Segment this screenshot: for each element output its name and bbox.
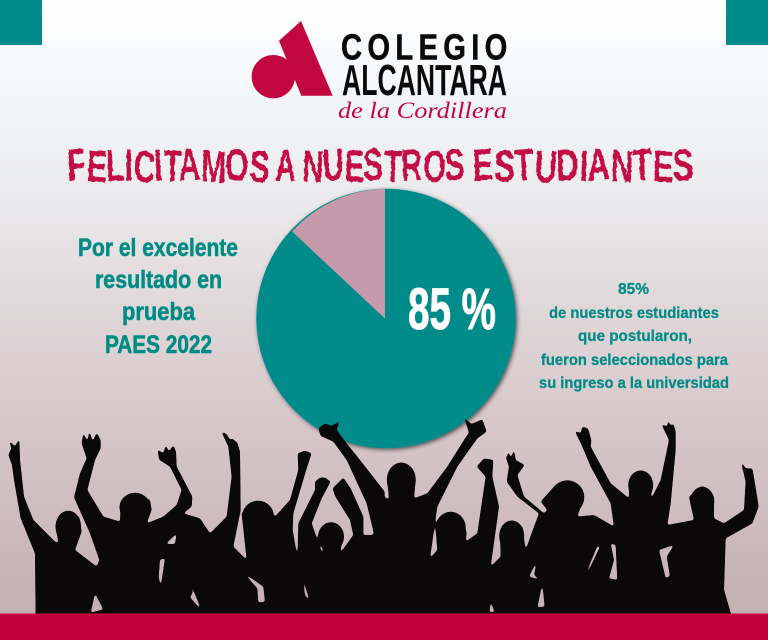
left text block: resultado en: [95, 266, 222, 294]
pie slice: 85%: [256, 189, 516, 448]
title: FELICITAMOS: [65, 139, 272, 192]
left text block: Por el excelente: [78, 234, 238, 262]
logo: Colegio Alcantara de la Cordillera: [252, 21, 507, 123]
left text block: PAES 2022: [105, 331, 212, 359]
logo wordmark: ALCANTARA: ALCANTARA: [342, 56, 507, 105]
title: [65, 139, 694, 193]
left text block: [78, 234, 238, 359]
right text block: 85%: [618, 281, 649, 298]
title: NUESTROS: [301, 139, 465, 192]
right text block: su ingreso a la universidad: [539, 375, 729, 392]
right text block: que postularon,: [578, 328, 692, 345]
right text block: de nuestros estudiantes: [549, 305, 719, 322]
corner square: top left: [0, 0, 42, 45]
logo wordmark: COLEGIO: COLEGIO: [341, 27, 507, 68]
title: A: [275, 140, 296, 191]
bottom bar: [0, 614, 768, 640]
title: ESTUDIANTES: [471, 139, 694, 193]
crowd silhouette: [8, 417, 759, 618]
right text block: fueron seleccionados para: [541, 352, 728, 369]
pie chart: 85 percent: [256, 189, 516, 448]
logo mark: [252, 21, 333, 98]
left text block: prueba: [122, 298, 196, 326]
logo tagline: de la Cordillera: [338, 98, 507, 123]
pie slice: 15%: [292, 189, 385, 318]
silhouette: rounded heads: [56, 462, 714, 552]
silhouette: left crowd: [8, 421, 385, 618]
corner square: top right: [726, 0, 768, 45]
pie value label: 85 %: [408, 277, 496, 342]
right text block: [539, 281, 729, 392]
silhouette: right crowd: [383, 417, 759, 618]
